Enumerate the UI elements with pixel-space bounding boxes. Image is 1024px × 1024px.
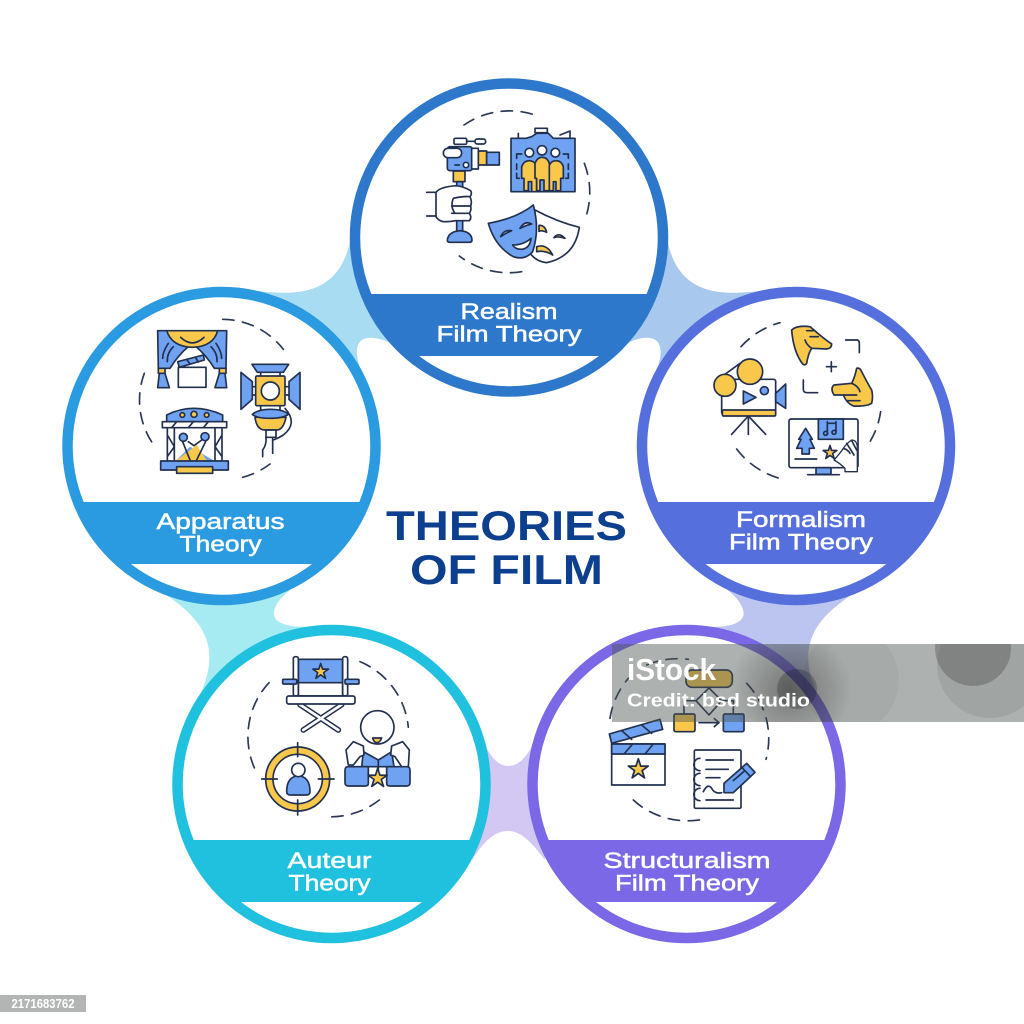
panel: apparatus theory bbox=[50, 292, 390, 600]
connector: apparatus to auteur bbox=[165, 590, 330, 695]
panel: auteur theory bbox=[160, 630, 500, 938]
label band bbox=[548, 840, 824, 902]
icon: formalism illustration bbox=[714, 323, 881, 478]
label: Apparatus bbox=[156, 509, 284, 534]
label band bbox=[658, 502, 934, 564]
label: Auteur bbox=[288, 848, 372, 873]
watermark band bbox=[612, 644, 1024, 722]
watermark brand: iStock bbox=[627, 652, 717, 687]
title: OF FILM bbox=[410, 546, 603, 593]
panel: structuralism film theory bbox=[520, 630, 860, 938]
label band bbox=[84, 502, 360, 564]
icon: structuralism illustration bbox=[609, 659, 769, 821]
icon: apparatus illustration bbox=[140, 319, 300, 477]
label: Theory bbox=[288, 870, 370, 896]
watermark credit: Credit: bsd studio bbox=[627, 690, 810, 710]
connector: auteur to structuralism bbox=[472, 740, 545, 860]
circle ring bbox=[642, 292, 950, 600]
circle ring bbox=[68, 292, 376, 600]
panel: formalism film theory bbox=[630, 292, 970, 600]
connector: realism to formalism bbox=[622, 228, 760, 382]
circle ring bbox=[178, 630, 486, 938]
label: Formalism bbox=[736, 507, 866, 532]
icon: auteur illustration bbox=[248, 657, 410, 817]
label: Realism bbox=[460, 299, 558, 324]
label: Structuralism bbox=[604, 848, 770, 873]
label: Film Theory bbox=[729, 530, 873, 554]
connector: formalism to structuralism bbox=[688, 590, 852, 695]
label: Film Theory bbox=[615, 870, 759, 896]
circle ring bbox=[532, 630, 840, 938]
label: Theory bbox=[180, 532, 262, 556]
title: THEORIES bbox=[386, 502, 627, 549]
label band bbox=[372, 294, 646, 356]
circle ring bbox=[355, 84, 663, 392]
panel: realism film theory bbox=[340, 84, 680, 392]
icon: realism illustration bbox=[427, 111, 590, 273]
image id tag: 2171683762 bbox=[12, 996, 74, 1011]
connector: realism to apparatus bbox=[258, 228, 395, 382]
label: Film Theory bbox=[436, 322, 582, 346]
label band bbox=[194, 840, 470, 902]
